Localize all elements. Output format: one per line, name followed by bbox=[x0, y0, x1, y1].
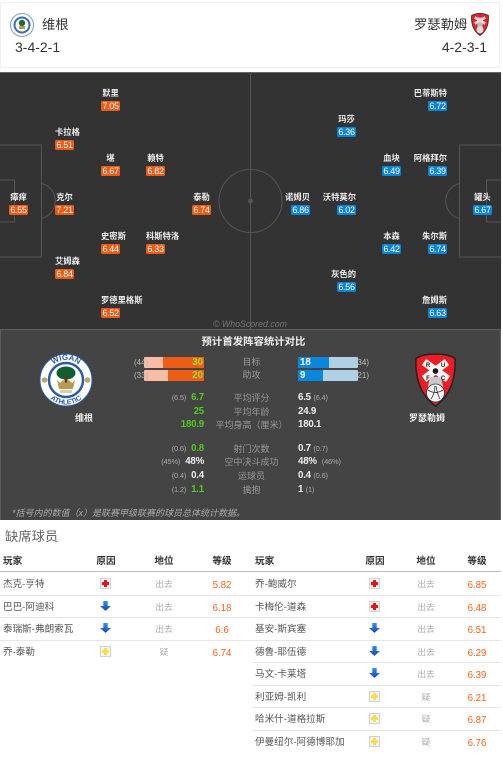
table row: 哈米什-道格拉斯: 6.87 bbox=[468, 715, 486, 726]
player: 阿格拜尔 bbox=[414, 153, 447, 176]
player: 罗德里格斯 bbox=[101, 295, 142, 318]
text: stat label aerial duels: 空中决斗成功 bbox=[224, 457, 278, 467]
player: 卡拉格 bbox=[55, 127, 80, 150]
player: 詹姆斯 bbox=[422, 295, 447, 318]
player: 本森 bbox=[382, 231, 401, 254]
text: 瘴痒 bbox=[10, 192, 27, 202]
text: stat label dribbles: 运球员 bbox=[238, 471, 265, 481]
player: 灰色的: 6.56 bbox=[338, 282, 355, 292]
table row: 哈米什-道格拉斯: 疑 bbox=[422, 714, 430, 724]
icon: Rotherham crest: U bbox=[441, 363, 445, 369]
table row: 基安-斯宾塞: 6.51 bbox=[468, 625, 486, 636]
text: 詹姆斯 bbox=[422, 295, 447, 305]
bar chart: goals home: 30 bbox=[192, 357, 203, 368]
player: 卡拉格: 6.51 bbox=[56, 140, 73, 150]
text: stat label tackles: 擒抱 bbox=[242, 485, 260, 495]
player: 瘴痒: 6.55 bbox=[10, 205, 27, 215]
panel: lineup stats comparison bbox=[0, 329, 501, 520]
table row: 乔-鲍威尔 bbox=[252, 578, 501, 592]
table row: 伊曼纽尔-阿德博耶加: 6.76 bbox=[468, 738, 486, 749]
text: home dribbles: (0.4) 0.4 bbox=[172, 470, 204, 481]
bar chart: goals away: 18 bbox=[300, 357, 311, 368]
text: stat label shots: 射门次数 bbox=[233, 444, 270, 454]
text: 诺姆贝 bbox=[285, 192, 310, 202]
text: 科斯特洛 bbox=[146, 231, 179, 241]
player: 诺姆贝: 6.86 bbox=[292, 205, 309, 215]
text: 血块 bbox=[383, 153, 400, 163]
player: 本森: 6.42 bbox=[383, 244, 400, 254]
table row: 伊曼纽尔-阿德博耶加 bbox=[252, 736, 501, 750]
player: 玛莎 bbox=[337, 114, 356, 137]
table row: 泰瑞斯-弗朗索瓦: 泰瑞斯-弗朗索瓦 bbox=[3, 624, 73, 635]
player: 克尔: 7.21 bbox=[56, 205, 73, 215]
text: stat label average rating: 平均评分 bbox=[233, 393, 270, 403]
table row: 巴巴-阿迪科: 6.18 bbox=[213, 603, 231, 614]
player: 血块: 6.49 bbox=[383, 166, 400, 176]
text: home shots: (0.6) 0.8 bbox=[172, 443, 204, 454]
text: away shots: 0.7 (0.7) bbox=[298, 443, 328, 454]
player: 沃特莫尔: 6.02 bbox=[338, 205, 355, 215]
chart: pitch markings bbox=[0, 72, 501, 329]
panel: pitch bbox=[0, 72, 501, 330]
text: left table header rating: 等级 bbox=[212, 556, 232, 567]
player: 科斯特洛 bbox=[146, 231, 179, 254]
text: stat label assists: 助攻 bbox=[242, 370, 260, 380]
panel: missing players table bbox=[0, 554, 501, 754]
table row: 基安-斯宾塞: 出去 bbox=[417, 624, 435, 634]
table row: 杰克-亨特 bbox=[0, 578, 252, 592]
player: 罗德里格斯: 6.52 bbox=[102, 308, 119, 318]
table row: 乔-鲍威尔: 出去 bbox=[417, 579, 435, 589]
bar chart: goals home bbox=[134, 357, 204, 368]
player: 血块 bbox=[382, 153, 401, 176]
bar chart: goals home: (44) bbox=[134, 358, 148, 367]
text: 默里 bbox=[102, 88, 119, 98]
table row: 德鲁-耶伍德: 6.29 bbox=[468, 648, 486, 659]
player: 赖特: 6.82 bbox=[147, 166, 164, 176]
table row: 基安-斯宾塞 bbox=[255, 623, 486, 636]
text: 灰色的 bbox=[331, 269, 356, 279]
table row: 巴巴-阿迪科: 巴巴-阿迪科 bbox=[3, 602, 54, 613]
text: 阿格拜尔 bbox=[414, 153, 447, 163]
player: 巴蒂斯特 bbox=[414, 88, 447, 111]
text: away age: 24.9 bbox=[298, 406, 316, 417]
text: away aerial: 48% (46%) bbox=[298, 456, 341, 467]
player: 罐头: 6.67 bbox=[474, 205, 491, 215]
player: 科斯特洛: 6.33 bbox=[147, 244, 164, 254]
table row: 马文-卡莱塔 bbox=[255, 668, 486, 681]
text: away tackles: 1 (1) bbox=[298, 484, 314, 495]
table row: 乔-鲍威尔: 乔-鲍威尔 bbox=[255, 579, 297, 590]
text: home rating: (6.5) 6.7 bbox=[172, 392, 204, 403]
player: 巴蒂斯特: 6.72 bbox=[429, 101, 446, 111]
text: left table header reason: 原因 bbox=[96, 556, 116, 567]
bar chart: assists away: (21) bbox=[355, 371, 369, 380]
icon: Wigan crest bbox=[40, 354, 92, 406]
player: 艾姆森: 6.84 bbox=[56, 269, 73, 279]
table row: 马文-卡莱塔: 6.39 bbox=[468, 670, 486, 681]
table row: 卡梅伦-道森: 6.48 bbox=[468, 603, 486, 614]
table row: 卡梅伦-道森: 卡梅伦-道森 bbox=[255, 602, 306, 613]
player: 詹姆斯: 6.63 bbox=[429, 308, 446, 318]
bar chart: goals away bbox=[298, 357, 369, 368]
icon: Rotherham crest: C bbox=[441, 376, 446, 382]
text: home team label: 维根 bbox=[75, 413, 93, 423]
table row: 杰克-亨特: 5.82 bbox=[213, 580, 231, 591]
text: home height: 180.9 bbox=[181, 419, 204, 430]
text: stat label average age: 平均年龄 bbox=[233, 407, 270, 417]
table row: 乔-泰勒: 乔-泰勒 bbox=[3, 647, 35, 658]
player: 默里: 7.05 bbox=[102, 101, 119, 111]
text: home age: 25 bbox=[194, 406, 204, 417]
text: 沃特莫尔 bbox=[323, 192, 356, 202]
text: 玛莎 bbox=[338, 114, 355, 124]
bar chart: assists home: 20 bbox=[192, 370, 203, 381]
text: home tackles: (1.2) 1.1 bbox=[172, 484, 204, 495]
player: 泰勒: 6.74 bbox=[193, 205, 210, 215]
text: away dribbles: 0.4 (0.6) bbox=[298, 470, 328, 481]
icon: Rotherham crest: R bbox=[426, 363, 431, 369]
player: 阿格拜尔: 6.39 bbox=[429, 166, 446, 176]
table row: 杰克-亨特: 出去 bbox=[155, 579, 173, 589]
table row: 基安-斯宾塞: 基安-斯宾塞 bbox=[255, 624, 306, 635]
icon: Wigan crest: WIGAN bbox=[50, 354, 82, 364]
table row: 泰瑞斯-弗朗索瓦: 出去 bbox=[155, 624, 173, 634]
table row: 杰克-亨特: 杰克-亨特 bbox=[3, 579, 45, 590]
player: 朱尔斯 bbox=[422, 231, 447, 254]
table row: 德鲁-耶伍德 bbox=[255, 646, 486, 659]
player: 玛莎: 6.36 bbox=[338, 127, 355, 137]
table row: 乔-泰勒: 6.74 bbox=[213, 648, 231, 659]
text: right table header rating: 等级 bbox=[467, 556, 487, 567]
text: 罐头 bbox=[474, 192, 491, 202]
icon: Rotherham crest small bbox=[471, 13, 489, 36]
text: footnote: *括号内的数值（x）是联赛甲级联赛的球员总体统计数据。 bbox=[12, 508, 245, 518]
bar chart: assists away: 9 bbox=[300, 370, 305, 381]
text: watermark: © WhoScored.com bbox=[213, 319, 287, 329]
player: 艾姆森 bbox=[55, 256, 80, 279]
table row: 伊曼纽尔-阿德博耶加: 疑 bbox=[422, 737, 430, 747]
text: 罗德里格斯 bbox=[101, 295, 142, 305]
player: 堪 bbox=[101, 153, 120, 176]
table row: 乔-鲍威尔: 6.85 bbox=[468, 580, 486, 591]
player: 泰勒 bbox=[192, 192, 211, 215]
table row: 巴巴-阿迪科: 出去 bbox=[155, 602, 173, 612]
icon: Wigan crest: ATHLETIC bbox=[50, 396, 81, 404]
table row: 哈米什-道格拉斯: 哈米什-道格拉斯 bbox=[255, 714, 325, 725]
text: 卡拉格 bbox=[55, 127, 80, 137]
table row: 卡梅伦-道森 bbox=[252, 601, 501, 615]
table row: 伊曼纽尔-阿德博耶加: 伊曼纽尔-阿德博耶加 bbox=[255, 737, 345, 748]
text: 克尔 bbox=[56, 192, 73, 202]
text: away rating: 6.5 (6.4) bbox=[298, 392, 328, 403]
text: left table header player: 玩家 bbox=[3, 556, 22, 567]
icon: Wigan crest small bbox=[10, 13, 34, 37]
table row: 利亚姆-凯利: 疑 bbox=[422, 692, 430, 702]
table row: 德鲁-耶伍德: 出去 bbox=[417, 647, 435, 657]
table row: 乔-泰勒 bbox=[0, 646, 252, 660]
text: home formation: 3-4-2-1 bbox=[15, 39, 60, 55]
table row: 乔-泰勒: 疑 bbox=[160, 647, 168, 657]
heading: home team name: 维根 bbox=[42, 17, 69, 32]
bar chart: assists home: (33) bbox=[134, 371, 148, 380]
table row: 利亚姆-凯利: 6.21 bbox=[468, 693, 486, 704]
text: 史密斯 bbox=[101, 231, 126, 241]
heading: stats title: 预计首发阵容统计对比 bbox=[202, 337, 305, 348]
heading: missing players: 缺席球员 bbox=[5, 529, 58, 544]
text: 本森 bbox=[383, 231, 400, 241]
text: 艾姆森 bbox=[55, 256, 80, 266]
text: 巴蒂斯特 bbox=[414, 88, 447, 98]
icon: Rotherham crest: F bbox=[426, 376, 430, 382]
player: 诺姆贝 bbox=[285, 192, 310, 215]
table row: 马文-卡莱塔: 马文-卡莱塔 bbox=[255, 669, 306, 680]
table row: 卡梅伦-道森: 出去 bbox=[417, 602, 435, 612]
player: 瘴痒 bbox=[9, 192, 28, 215]
text: away formation: 4-2-3-1 bbox=[442, 39, 487, 55]
player: 史密斯 bbox=[101, 231, 126, 254]
table row: 利亚姆-凯利: 利亚姆-凯利 bbox=[255, 692, 306, 703]
text: right table header status: 地位 bbox=[416, 556, 436, 567]
player: 罐头 bbox=[473, 192, 492, 215]
text: left table header status: 地位 bbox=[154, 556, 174, 567]
table row: 巴巴-阿迪科 bbox=[3, 601, 231, 614]
table row: 马文-卡莱塔: 出去 bbox=[417, 669, 435, 679]
text: home aerial: (45%) 48% bbox=[161, 456, 204, 467]
panel: match header bbox=[0, 2, 500, 68]
bar chart: assists home bbox=[134, 370, 204, 381]
player: 堪: 6.67 bbox=[102, 166, 119, 176]
bar chart: goals away: (34) bbox=[355, 358, 369, 367]
text: 赖特 bbox=[147, 153, 164, 163]
text: stat label goals: 目标 bbox=[242, 357, 260, 367]
player: 克尔 bbox=[55, 192, 74, 215]
player: 灰色的 bbox=[331, 269, 356, 292]
player: 赖特 bbox=[146, 153, 165, 176]
table row: 利亚姆-凯利 bbox=[252, 691, 501, 705]
heading: away team name: 罗瑟勒姆 bbox=[414, 17, 467, 32]
icon: Rotherham crest bbox=[415, 353, 456, 407]
table row: 泰瑞斯-弗朗索瓦: 6.6 bbox=[215, 625, 229, 636]
text: away height: 180.1 bbox=[298, 419, 321, 430]
player: 史密斯: 6.44 bbox=[102, 244, 119, 254]
text: 朱尔斯 bbox=[422, 231, 447, 241]
table row: 哈米什-道格拉斯 bbox=[252, 713, 501, 727]
text: right table header reason: 原因 bbox=[365, 556, 385, 567]
text: 堪 bbox=[106, 153, 115, 163]
player: 沃特莫尔 bbox=[323, 192, 356, 215]
text: away team label: 罗瑟勒姆 bbox=[409, 413, 445, 423]
text: stat label average height: 平均身高（厘米） bbox=[215, 420, 288, 430]
player: 默里 bbox=[101, 88, 120, 111]
text: right table header player: 玩家 bbox=[255, 556, 274, 567]
bar chart: assists away bbox=[298, 370, 369, 381]
table row: 德鲁-耶伍德: 德鲁-耶伍德 bbox=[255, 647, 306, 658]
player: 朱尔斯: 6.74 bbox=[429, 244, 446, 254]
text: 泰勒 bbox=[193, 192, 210, 202]
table row: 泰瑞斯-弗朗索瓦 bbox=[3, 623, 229, 636]
